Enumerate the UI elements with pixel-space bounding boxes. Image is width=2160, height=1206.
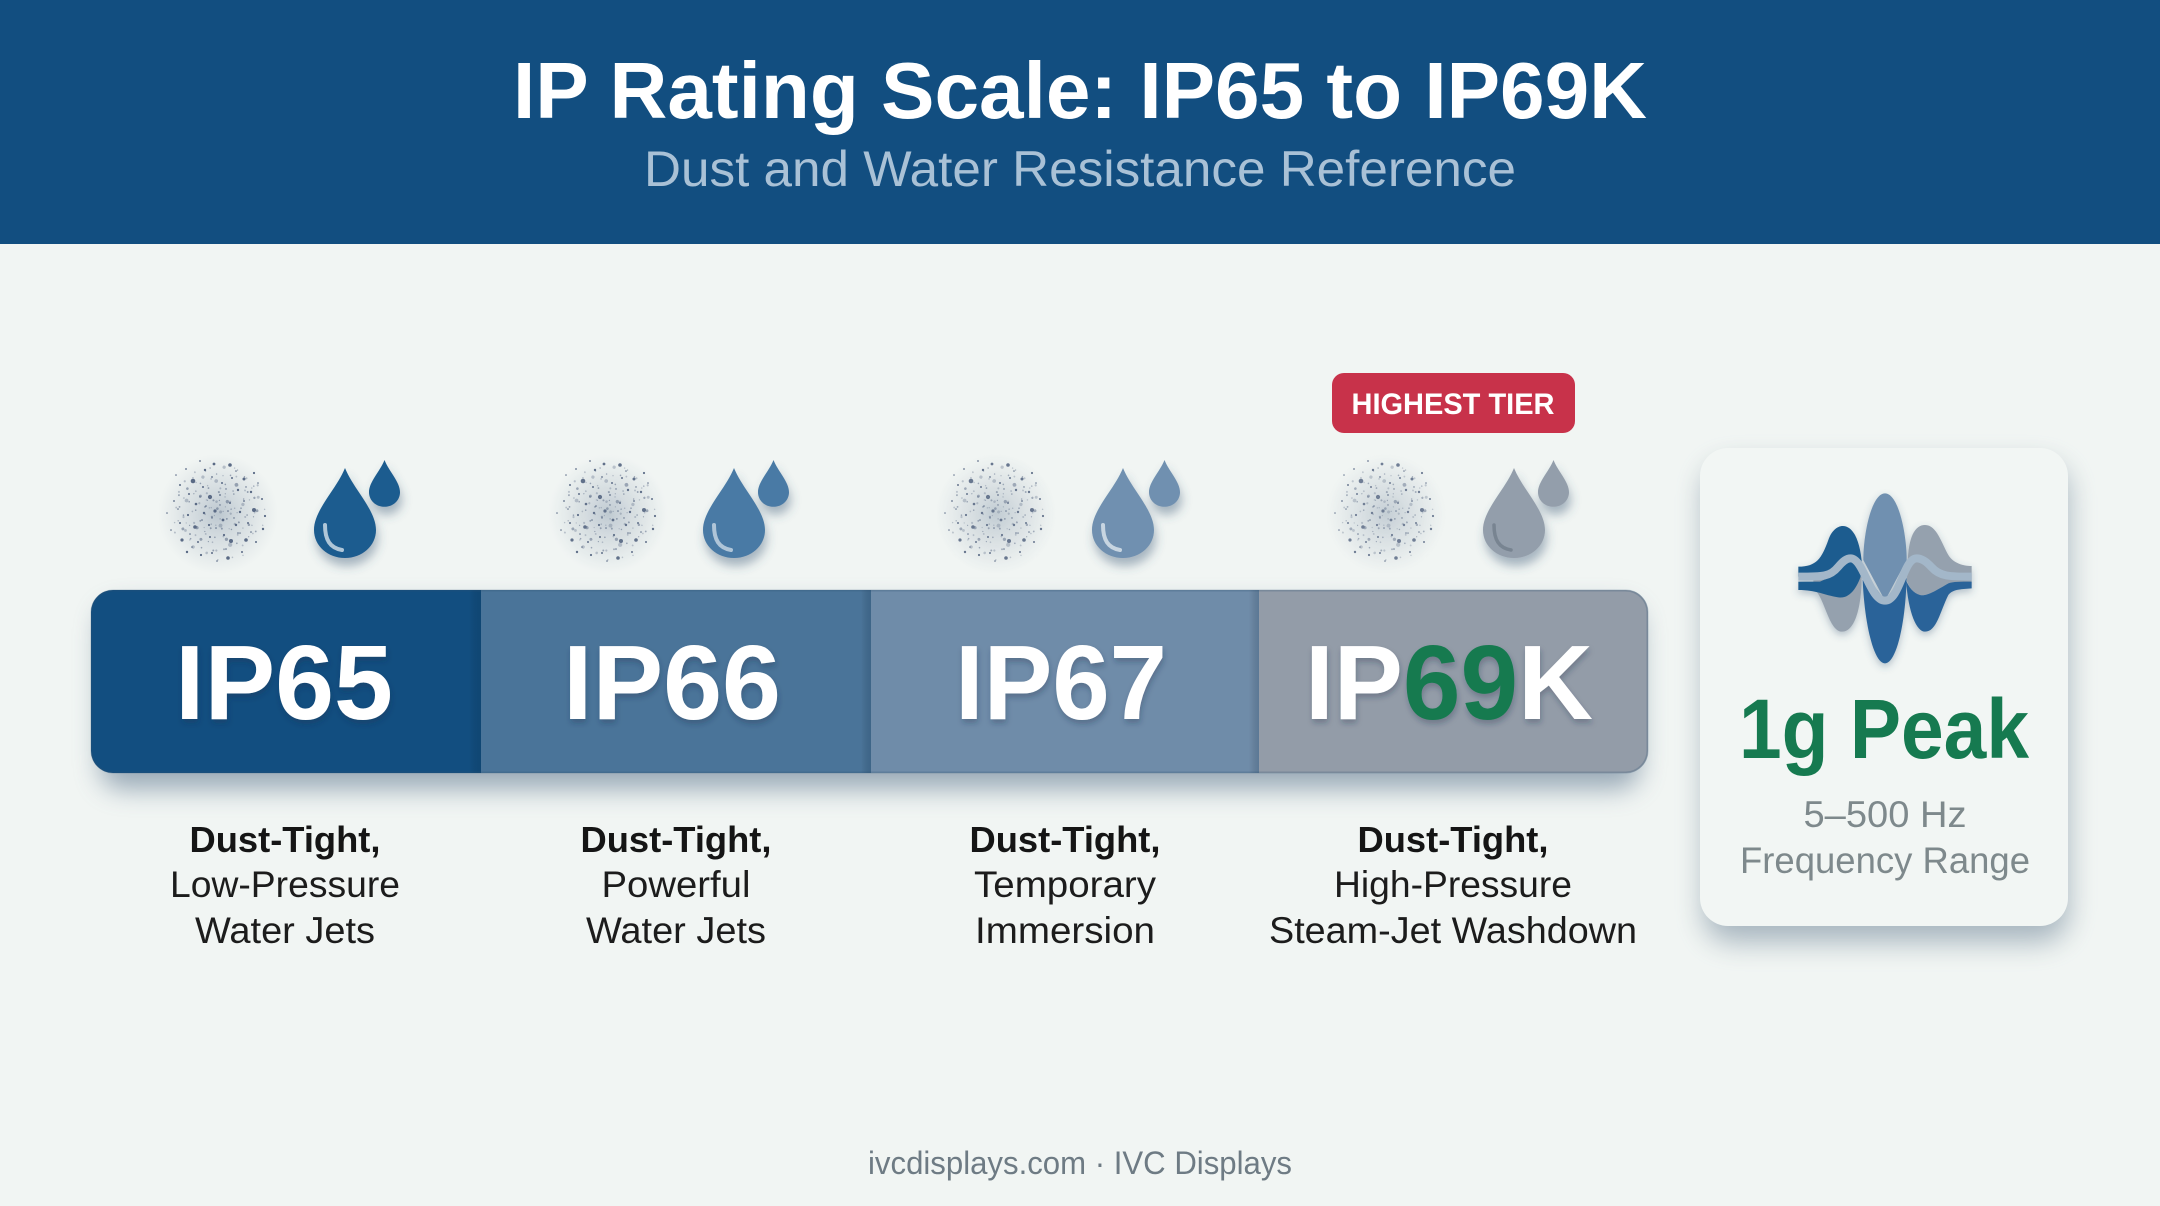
label: IP66: IP66 (563, 624, 781, 742)
frequency caption: Frequency Range (1740, 840, 2030, 881)
label: IP65: IP65 (175, 624, 393, 742)
icons: IP66 dust and water (548, 452, 789, 574)
description: IP67: Dust-Tight, (970, 819, 1160, 860)
icons: IP65 dust and water (158, 452, 400, 574)
title: IP Rating Scale: IP65 to IP69K (513, 46, 1647, 135)
label: IP69K: IP69K (1305, 624, 1593, 742)
description: IP66: Water Jets (586, 909, 766, 951)
description: IP67: Immersion (975, 909, 1155, 951)
segment: IP67 (871, 590, 1259, 773)
description: IP65: Dust-Tight, (190, 819, 380, 860)
label: IP67: IP67 (955, 624, 1167, 742)
description: IP67 (970, 819, 1160, 951)
icons: IP67 dust and water (936, 452, 1180, 574)
badge: highest tier: HIGHEST TIER (1352, 388, 1555, 421)
badge: highest tier (1332, 373, 1575, 433)
description: IP65: Water Jets (195, 909, 375, 951)
description: IP69K (1269, 819, 1637, 951)
footer: ivcdisplays.com · IVC Displays (868, 1145, 1292, 1181)
description: IP65 (170, 819, 400, 951)
icons: IP69K dust and water (1326, 452, 1569, 574)
description: IP69K: Steam-Jet Washdown (1269, 909, 1637, 951)
scale bar (91, 590, 1648, 789)
header band (0, 0, 2160, 244)
segment: IP66 (481, 590, 871, 773)
description: IP66: Dust-Tight, (580, 819, 772, 860)
description: IP65: Low-Pressure (170, 863, 400, 905)
metric: 1g Peak: 1g Peak (1739, 682, 2029, 776)
segment: IP69K (1259, 590, 1648, 773)
description: IP66: Powerful (602, 863, 750, 905)
segment: IP65 (91, 590, 481, 773)
description: IP69K: High-Pressure (1334, 863, 1572, 905)
frequency value: 5–500 Hz (1804, 794, 1966, 835)
panel: vibration card (1700, 448, 2068, 942)
description: IP69K: Dust-Tight, (1358, 819, 1548, 860)
subtitle: Dust and Water Resistance Reference (644, 141, 1516, 197)
description: IP67: Temporary (974, 863, 1156, 905)
description: IP66 (580, 819, 772, 951)
icon: vibration wave (1794, 492, 1976, 670)
